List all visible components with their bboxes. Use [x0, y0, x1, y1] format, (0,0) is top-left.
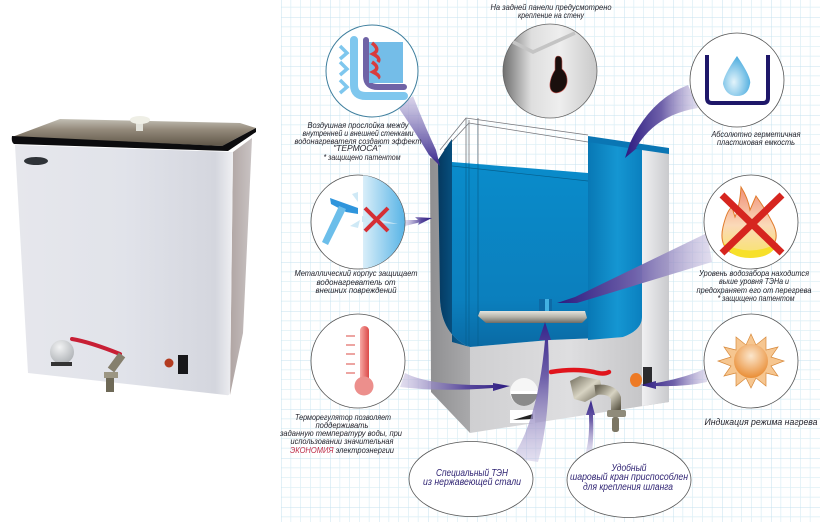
circle — [311, 314, 405, 408]
callout: ball valve — [567, 442, 691, 518]
circle — [690, 33, 784, 127]
text: overheating: * защищено патентом — [718, 293, 795, 303]
callout: hammer — [311, 175, 405, 269]
text: thermostat: использовании значительная — [290, 436, 394, 446]
circle — [503, 24, 597, 118]
icon: flame core — [723, 243, 778, 258]
indicator lamp — [630, 373, 642, 387]
photo: glass lid — [12, 119, 256, 146]
icon: hammer — [322, 192, 398, 245]
text: air gap: водонагревателя создают эффект — [294, 136, 422, 146]
switch — [643, 367, 652, 386]
callout: overheating — [704, 175, 798, 269]
text: air gap: Воздушная прослойка между — [308, 120, 409, 130]
text: thermostat: ЭКОНОМИЯ электроэнергии — [290, 445, 394, 455]
diagram: heater cutaway — [430, 118, 669, 433]
text: wall mount — [490, 2, 612, 20]
text: hammer: водонагреватель от — [316, 277, 396, 287]
text: thermostat: заданную температуру воды, при — [279, 428, 402, 438]
callout: ball valve: шаровый кран приспособлен — [570, 471, 688, 483]
text: overheating: выше уровня ТЭНа и — [719, 276, 789, 286]
top rim band — [588, 136, 669, 154]
circle — [704, 314, 798, 408]
photo: lid rim — [12, 128, 256, 151]
ellipse — [409, 442, 533, 516]
circle — [311, 175, 405, 269]
text: wall mount: На задней панели предусмотрено — [490, 2, 612, 12]
text: heating indicator: Индикация режима нагрева — [704, 417, 818, 427]
photo: thermostat knob — [50, 340, 74, 366]
text: sealed tank: Абсолютно герметичная — [711, 129, 801, 139]
text: hammer: Металлический корпус защищает — [294, 268, 418, 278]
arrow: sun to lamp — [641, 368, 707, 389]
callout: thermostat — [311, 314, 405, 408]
arrow: element — [512, 322, 551, 462]
arrow: tank — [625, 85, 698, 158]
thermostat scale — [510, 410, 535, 423]
icon: red cross — [365, 208, 388, 231]
text: thermostat — [279, 412, 402, 455]
photo: front panel — [15, 145, 233, 395]
text: Специальный ТЭН — [436, 468, 509, 479]
icon: water drop — [723, 56, 750, 96]
photo: lid knob — [130, 116, 150, 131]
photo: side wall — [230, 138, 252, 395]
arrow: hammer — [405, 217, 432, 226]
callout: heating indicator — [704, 314, 798, 408]
arrow: tap — [586, 400, 595, 452]
top wireframe — [440, 118, 588, 163]
photo: indicator lamp — [164, 358, 174, 368]
text: thermostat: поддерживать — [316, 420, 368, 430]
icon: insulated wall — [340, 40, 404, 96]
icon: keyhole — [513, 33, 575, 93]
red tap handle — [551, 370, 609, 374]
thermostat knob — [510, 378, 538, 406]
arrow: air gap — [398, 96, 440, 166]
text: overheating — [696, 268, 812, 303]
icon: red cross — [722, 195, 782, 253]
icon: container — [707, 55, 768, 103]
water line and inner edges — [452, 162, 588, 346]
callout: sealed tank — [690, 33, 784, 127]
arrow: thermometer — [400, 373, 510, 391]
background grid — [281, 0, 820, 522]
callout: air gap — [326, 25, 418, 117]
photo: tap — [72, 339, 122, 392]
callout: ball valve: для крепления шланга — [583, 482, 673, 493]
blue tank front panel — [588, 137, 642, 340]
text: Удобный — [611, 462, 647, 474]
product photo: water heater — [12, 116, 256, 395]
heating element bar — [478, 299, 587, 323]
left grey wall and base side — [430, 158, 470, 433]
callout: heating element: из нержавеющей стали — [423, 477, 521, 488]
right white strip — [642, 150, 669, 406]
text: air gap: "ТЕРМОСА" — [333, 143, 382, 153]
arrow: fire to outlet — [557, 233, 712, 303]
circle — [704, 175, 798, 269]
text: hammer — [294, 268, 418, 295]
blue tank back water — [440, 160, 623, 347]
ellipse — [567, 442, 691, 518]
circle — [326, 25, 418, 117]
text: wall mount: крепление на стену — [518, 10, 585, 20]
text: air gap: внутренней и внешней стенками — [302, 128, 414, 138]
callout: wall mount — [503, 24, 597, 118]
text: air gap — [294, 120, 422, 162]
icon: thermometer — [346, 326, 374, 396]
text: hammer: внешних повреждений — [316, 285, 397, 295]
brass tap — [570, 376, 626, 432]
text: sealed tank: пластиковая емкость — [717, 137, 795, 147]
icon: flame — [722, 187, 776, 257]
icon: sun — [718, 334, 784, 388]
callout: heating element — [409, 442, 533, 516]
text: air gap: * защищено патентом — [324, 152, 401, 162]
right shaded half — [363, 175, 405, 269]
grey base front — [470, 148, 669, 433]
photo: logo — [24, 157, 48, 165]
text: thermostat: Терморегулятор позволяет — [295, 412, 391, 422]
text: sealed tank — [711, 129, 801, 147]
blue tank left dark wall — [438, 139, 470, 347]
photo: switch — [178, 355, 188, 374]
